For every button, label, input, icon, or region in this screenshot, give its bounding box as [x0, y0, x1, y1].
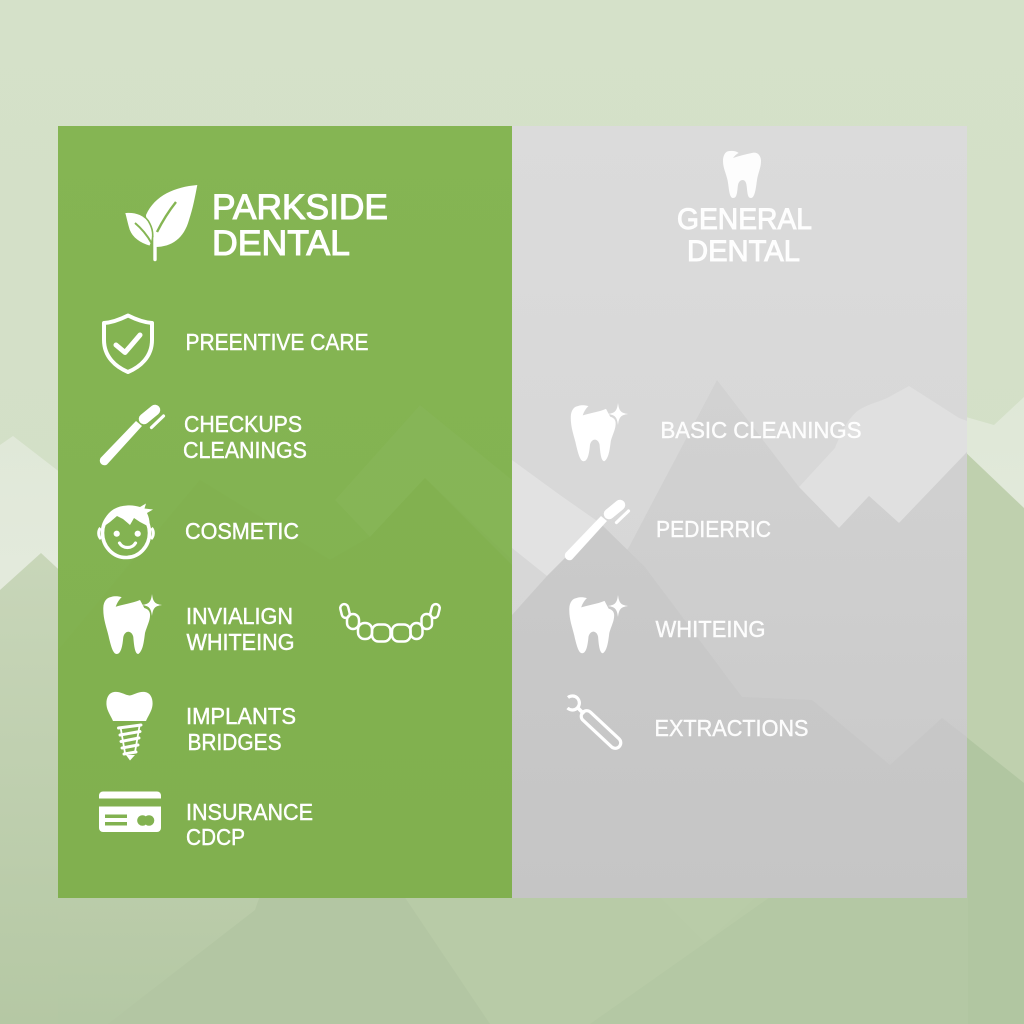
icon: sparkling tooth: [571, 403, 628, 461]
panel: General Dental: [512, 126, 967, 898]
icon: implant: [106, 692, 153, 760]
label: insurance cdcp: CDCP: [186, 824, 245, 850]
label: implants bridges: [186, 703, 296, 755]
icon: tooth: [723, 151, 761, 198]
logo: leaf: [124, 185, 197, 260]
heading: General Dental: DENTAL: [687, 235, 800, 268]
heading: Parkside Dental: PARKSIDE: [212, 187, 388, 227]
panel: Parkside Dental: [58, 126, 512, 898]
label: pediatric: PEDIERRIC: [656, 516, 771, 542]
heading: Parkside Dental: DENTAL: [212, 223, 350, 263]
label: implants bridges: BRIDGES: [188, 729, 282, 755]
label: insurance cdcp: INSURANCE: [186, 799, 313, 825]
label: implants bridges: IMPLANTS: [186, 703, 296, 729]
label: whitening: WHITEING: [656, 616, 766, 642]
label: invisalign whitening: INVIALIGN: [186, 603, 293, 629]
label: checkups cleanings: [183, 411, 307, 463]
label: checkups cleanings: CLEANINGS: [183, 437, 307, 463]
label: invisalign whitening: WHITEING: [186, 629, 294, 655]
icon: toothbrush: [100, 410, 164, 465]
label: invisalign whitening: [186, 603, 294, 655]
label: basic cleanings: BASIC CLEANINGS: [660, 417, 862, 443]
label: cosmetic: COSMETIC: [185, 518, 299, 544]
heading: General Dental: GENERAL: [677, 203, 812, 236]
label: preventive care: PREENTIVE CARE: [186, 329, 368, 355]
icon: shield: [104, 316, 152, 372]
heading: General Dental: [677, 203, 812, 268]
icon: insurance card: [99, 792, 161, 832]
icon: dental arch: [339, 603, 441, 642]
icon: child face: [99, 504, 153, 558]
icon: sparkling tooth: [103, 594, 162, 654]
icon: sparkling tooth: [569, 595, 628, 653]
label: insurance cdcp: [186, 799, 313, 850]
label: checkups cleanings: CHECKUPS: [184, 411, 302, 437]
heading: Parkside Dental: [212, 187, 388, 263]
label: extractions: EXTRACTIONS: [654, 715, 808, 741]
icon: extraction tool: [568, 696, 623, 751]
icon: toothbrush: [565, 505, 628, 560]
